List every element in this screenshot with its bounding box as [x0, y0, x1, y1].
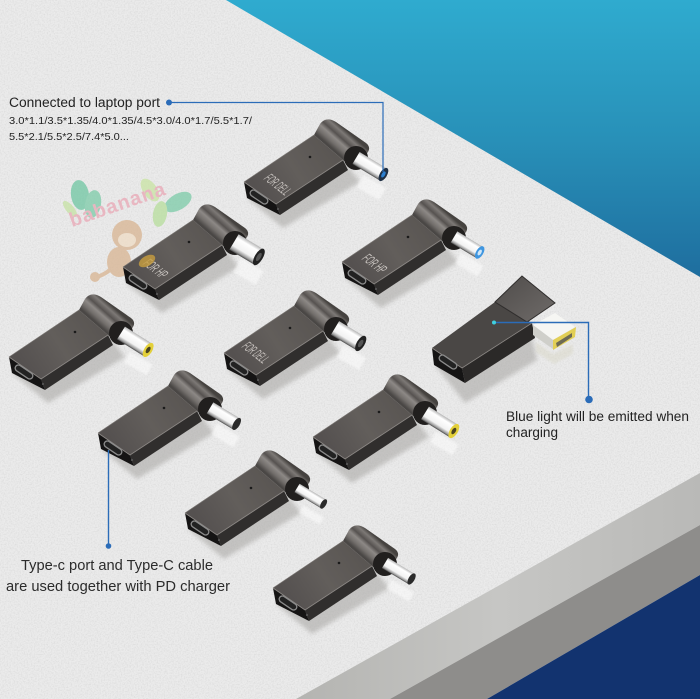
slab edge: dark grey band	[390, 525, 700, 699]
watermark: babanana monkey logo	[61, 175, 195, 282]
watermark: babanana monkey logo: babanana	[66, 178, 169, 232]
text block: blue light note	[506, 409, 689, 440]
adapter: Type-C callout unit	[98, 370, 243, 479]
adapter: FOR HP blue tip	[342, 199, 486, 308]
adapter: FOR HP blue tip: FOR HP	[358, 252, 390, 276]
heading: connected to laptop port: Connected to laptop port	[9, 95, 160, 110]
adapter: FOR DELL middle	[224, 290, 369, 399]
adapter: FOR DELL middle: FOR DELL	[238, 340, 272, 366]
background: navy corner	[487, 575, 700, 699]
text block: supported sizes: 5.5*2.1/5.5*2.5/7.4*5.0...	[9, 131, 129, 143]
text block: type-c note	[6, 557, 230, 595]
adapter: bottom unit	[273, 525, 417, 634]
adapter: FOR HP wide pin	[123, 204, 267, 313]
adapter: FOR DELL top	[244, 119, 390, 228]
adapter: thin pin lower	[185, 450, 329, 559]
callout line: type-c port	[106, 450, 111, 549]
text block: blue light note: charging	[506, 425, 558, 440]
text block: supported sizes	[9, 115, 252, 143]
adapter: Lenovo square tip	[432, 276, 576, 403]
text block: supported sizes: 3.0*1.1/3.5*1.35/4.0*1.35/4.5*3.0/4.0*1.7/5.5*1.7/	[9, 115, 252, 127]
background: teal gradient corner	[226, 0, 700, 277]
text block: type-c note: Type-c port and Type-C cable	[21, 557, 213, 574]
callout line: blue light	[492, 320, 593, 403]
adapter: yellow tip left	[9, 294, 156, 403]
adapter: FOR HP wide pin: FOR HP	[139, 257, 171, 281]
slab edge: light grey band	[296, 473, 700, 699]
text block: type-c note: are used together with PD charger	[6, 578, 230, 595]
adapter: FOR DELL top: FOR DELL	[260, 172, 294, 198]
adapter: yellow tip centre	[313, 374, 461, 483]
text block: blue light note: Blue light will be emitted when	[506, 409, 689, 424]
callout line: laptop port	[166, 100, 383, 172]
